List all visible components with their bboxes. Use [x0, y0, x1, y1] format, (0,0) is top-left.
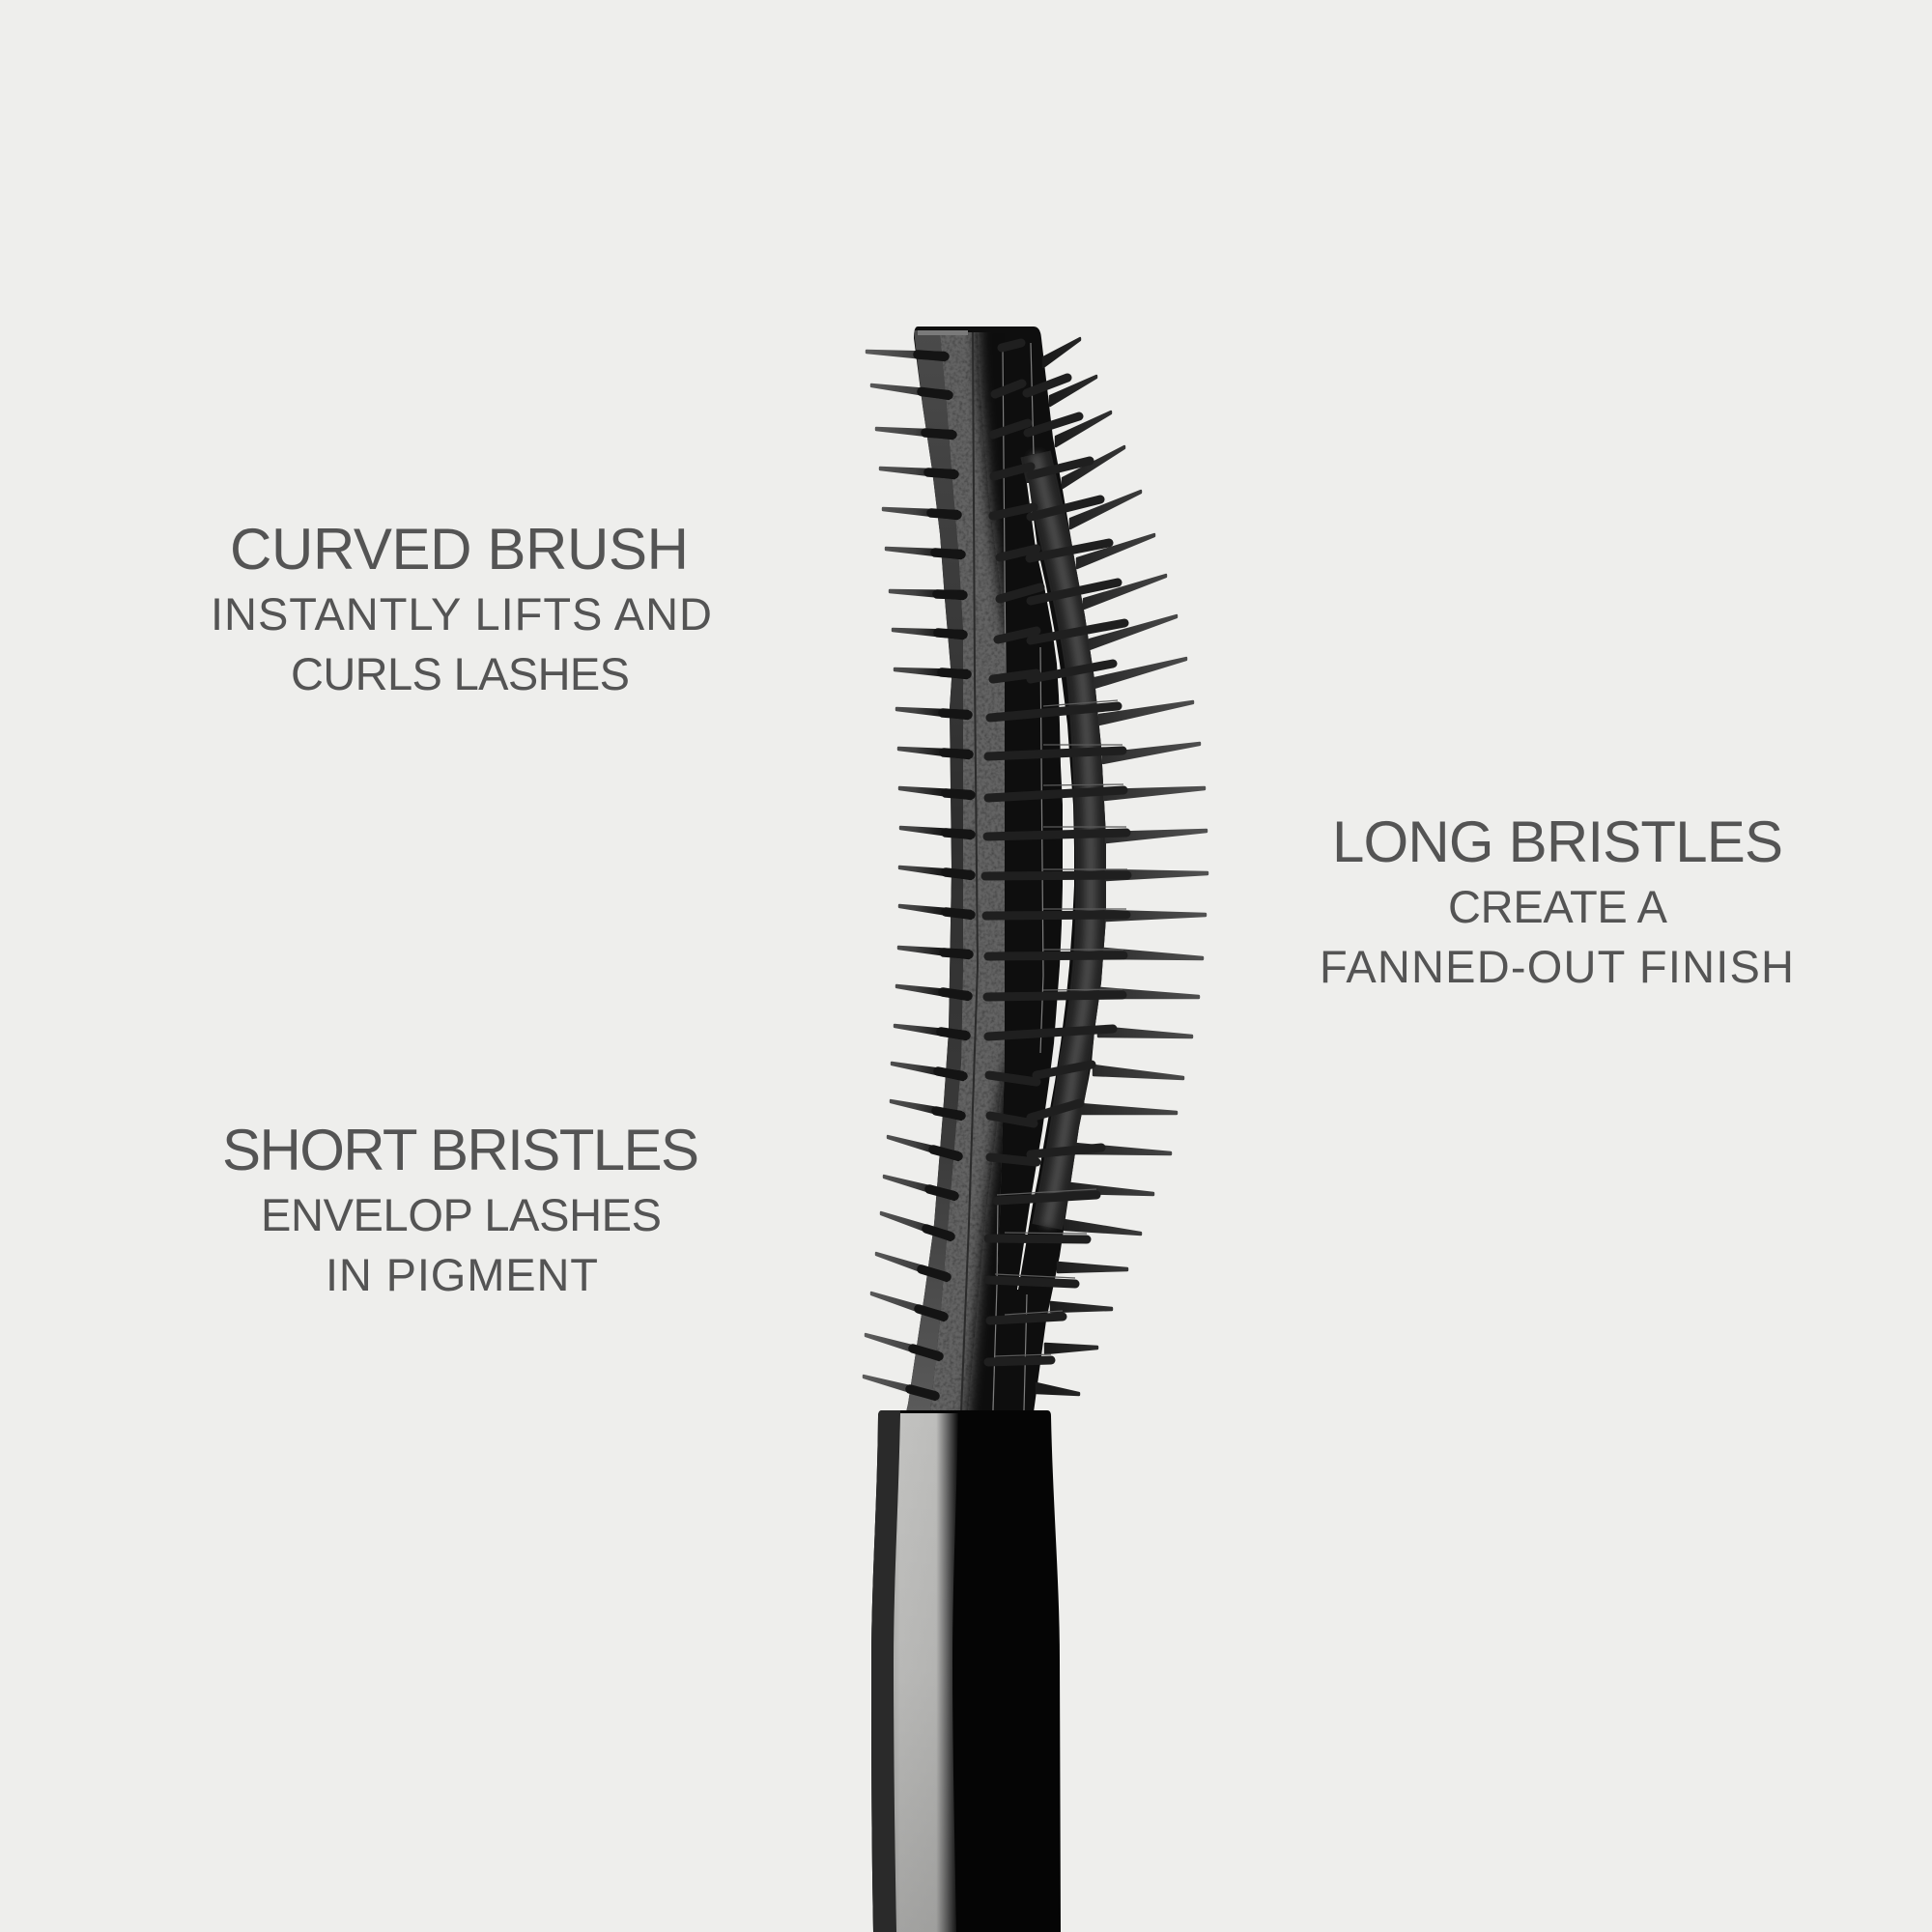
heading: SHORT BRISTLES [222, 1118, 699, 1182]
description line 2: IN PIGMENT [326, 1249, 598, 1300]
description line 2: FANNED-OUT FINISH [1320, 941, 1794, 992]
long right bristles [1037, 338, 1208, 1395]
heading: LONG BRISTLES [1332, 810, 1783, 874]
infographic canvas [214, 327, 1791, 1932]
front short bristle rows [985, 343, 1127, 1362]
handle highlight [894, 1413, 958, 1932]
description line 1: INSTANTLY LIFTS AND [211, 588, 712, 639]
gap between core ribs [1017, 483, 1074, 1290]
callout: long bristles [1320, 810, 1794, 992]
callout: short bristles [222, 1118, 699, 1300]
left bristles [864, 351, 971, 1400]
core frame lines [993, 343, 1043, 1410]
callout: curved brush [211, 517, 712, 699]
description line 2: CURLS LASHES [291, 648, 630, 699]
handle [871, 1410, 1061, 1932]
brush core [904, 319, 1106, 1430]
heading: CURVED BRUSH [230, 517, 689, 582]
description line 1: CREATE A [1448, 881, 1668, 932]
description line 1: ENVELOP LASHES [261, 1189, 662, 1240]
mascara wand [864, 319, 1208, 1932]
